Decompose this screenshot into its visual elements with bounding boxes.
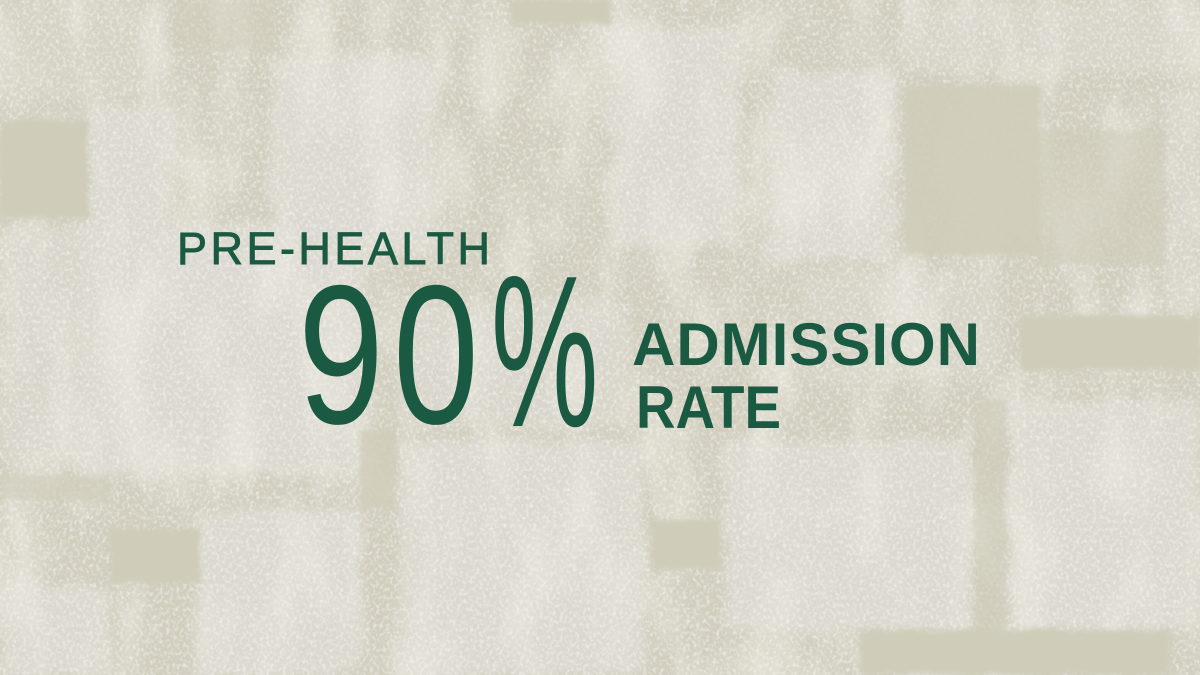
heading: PRE-HEALTH: PRE-HEALTH: [177, 223, 490, 274]
statistic: 90 percent: 9: [298, 243, 384, 465]
statistic: 90 percent: [298, 231, 598, 473]
statistic: 90 percent: %: [491, 231, 598, 473]
label: ADMISSION RATE: [632, 311, 980, 441]
statistic: 90 percent: 0: [393, 243, 479, 465]
label: ADMISSION RATE: RATE: [636, 374, 781, 441]
label: ADMISSION RATE: ADMISSION: [632, 311, 980, 378]
